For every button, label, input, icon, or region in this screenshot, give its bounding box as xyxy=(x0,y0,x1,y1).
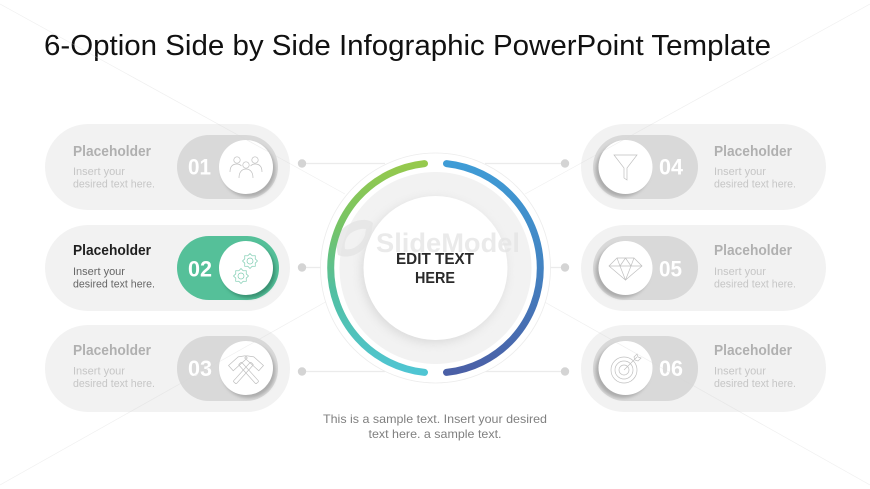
heading 06: Placeholder xyxy=(714,343,792,359)
icon: diamond xyxy=(609,258,642,280)
panel: option 04 xyxy=(581,124,826,210)
panel: option 03 xyxy=(45,325,290,412)
text block 03 xyxy=(73,366,155,390)
text block 04 xyxy=(714,166,796,190)
panel: option 01 xyxy=(45,124,290,210)
center label: HERE xyxy=(415,270,455,287)
icon: people xyxy=(230,157,262,178)
text block 06: desired text here. xyxy=(714,378,796,390)
text block 01 xyxy=(73,166,155,190)
heading 03: Placeholder xyxy=(73,343,151,359)
caption: This is a sample text. Insert your desired xyxy=(323,412,547,426)
title: 6-Option Side by Side Infographic PowerPoint Template xyxy=(44,30,771,62)
text block 02: Insert your xyxy=(73,266,125,278)
center label: EDIT TEXT xyxy=(396,251,474,268)
number 01: 01 xyxy=(188,154,211,180)
panel: option 02 xyxy=(45,225,290,311)
text block 02: desired text here. xyxy=(73,278,155,290)
number 06: 06 xyxy=(659,356,683,381)
heading 01: Placeholder xyxy=(73,144,151,160)
text block 05: Insert your xyxy=(714,266,766,278)
number 03: 03 xyxy=(188,356,212,381)
icon: funnel xyxy=(614,155,637,180)
number 04: 04 xyxy=(659,154,684,180)
connectors xyxy=(298,159,569,376)
watermark: SlideModel xyxy=(376,228,520,258)
text block 05 xyxy=(714,266,796,290)
panel: option 06 xyxy=(581,325,826,412)
text block 06 xyxy=(714,366,796,390)
arc: blue xyxy=(446,164,540,372)
text block 02 xyxy=(73,266,155,290)
text block 05: desired text here. xyxy=(714,278,796,290)
icon: hammers xyxy=(228,353,264,389)
central ring diagram xyxy=(320,153,550,383)
text block 04: Insert your xyxy=(714,166,766,178)
text block 04: desired text here. xyxy=(714,178,796,190)
number 05: 05 xyxy=(659,256,682,282)
watermark xyxy=(337,220,520,258)
heading 02: Placeholder xyxy=(73,243,151,259)
number 02: 02 xyxy=(188,256,212,282)
caption: text here. a sample text. xyxy=(368,427,502,441)
heading 04: Placeholder xyxy=(714,144,792,160)
icon: gears xyxy=(234,254,258,284)
panel: option 05 xyxy=(581,225,826,311)
center label xyxy=(396,251,474,287)
caption xyxy=(323,412,547,441)
text block 03: Insert your xyxy=(73,366,125,378)
text block 06: Insert your xyxy=(714,366,766,378)
arc: green to teal xyxy=(331,164,424,372)
icon: target xyxy=(611,354,641,383)
text block 01: desired text here. xyxy=(73,178,155,190)
heading 05: Placeholder xyxy=(714,243,792,259)
text block 03: desired text here. xyxy=(73,378,155,390)
text block 01: Insert your xyxy=(73,166,125,178)
